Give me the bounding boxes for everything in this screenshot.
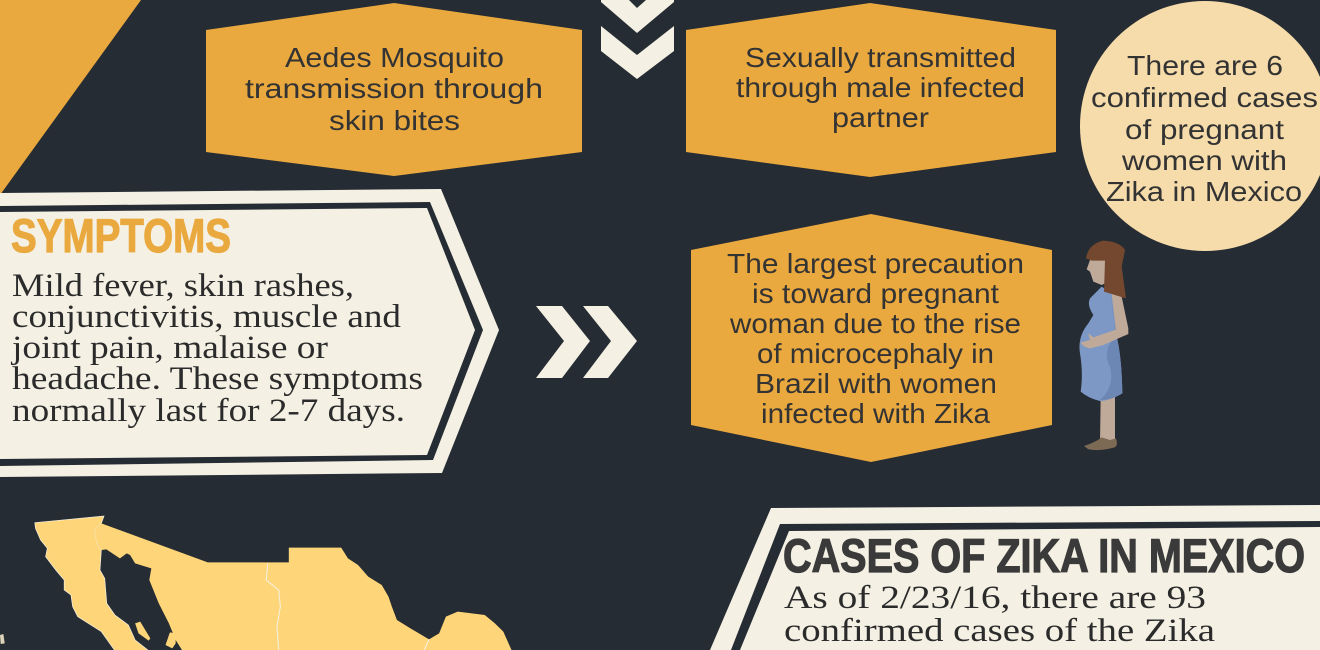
panel: pregnancy precaution: of microcephaly in bbox=[757, 338, 994, 369]
text block: symptoms description: headache. These symptoms bbox=[12, 361, 423, 397]
callout: confirmed cases circle bbox=[1080, 1, 1320, 251]
panel: pregnancy precaution: infected with Zika bbox=[761, 398, 990, 429]
heading: symptoms: SYMPTOMS bbox=[11, 209, 231, 262]
panel: pregnancy precaution: woman due to the rise bbox=[729, 308, 1021, 339]
panel: sexual transmission bbox=[686, 3, 1056, 177]
callout: confirmed cases circle: of pregnant bbox=[1125, 114, 1284, 145]
panel: symptoms bbox=[0, 189, 499, 477]
callout: confirmed cases circle: confirmed cases bbox=[1091, 82, 1318, 113]
callout: confirmed cases circle: women with bbox=[1121, 145, 1287, 176]
text block: symptoms description: Mild fever, skin rashes, bbox=[12, 268, 354, 304]
text block: symptoms description bbox=[11, 268, 423, 429]
panel: mosquito transmission: skin bites bbox=[329, 105, 460, 136]
panel: pregnancy precaution: Brazil with women bbox=[755, 368, 997, 399]
panel: sexual transmission: partner bbox=[832, 102, 929, 133]
panel: pregnancy precaution bbox=[691, 214, 1052, 462]
text block: symptoms description: normally last for 2-7 days. bbox=[12, 393, 405, 429]
panel: sexual transmission: Sexually transmitted bbox=[745, 42, 1016, 73]
callout: confirmed cases circle: Zika in Mexico bbox=[1106, 176, 1302, 207]
panel: mosquito transmission bbox=[206, 3, 582, 176]
text block: cases description: confirmed cases of the Zika bbox=[784, 613, 1215, 649]
corner triangle bbox=[0, 0, 141, 195]
panel: pregnancy precaution: is toward pregnant bbox=[752, 278, 999, 309]
icon: pregnant woman bbox=[1079, 241, 1128, 450]
text block: symptoms description: conjunctivitis, muscle and bbox=[12, 299, 402, 335]
panel: mosquito transmission: Aedes Mosquito bbox=[285, 42, 504, 73]
arrow: right chevrons bbox=[536, 306, 637, 378]
panel: mosquito transmission: transmission through bbox=[245, 73, 543, 104]
text block: symptoms description: joint pain, malaise or bbox=[11, 330, 328, 366]
arrow: down chevrons bbox=[601, 0, 674, 79]
callout: confirmed cases circle: There are 6 bbox=[1127, 50, 1283, 81]
map: Mexico bbox=[0, 516, 512, 650]
panel: sexual transmission: through male infected bbox=[736, 72, 1025, 103]
panel: pregnancy precaution: The largest precaution bbox=[727, 248, 1024, 279]
text block: cases description bbox=[784, 580, 1215, 649]
panel: cases of Zika in Mexico bbox=[710, 505, 1320, 650]
text block: cases description: As of 2/23/16, there are 93 bbox=[784, 580, 1206, 616]
